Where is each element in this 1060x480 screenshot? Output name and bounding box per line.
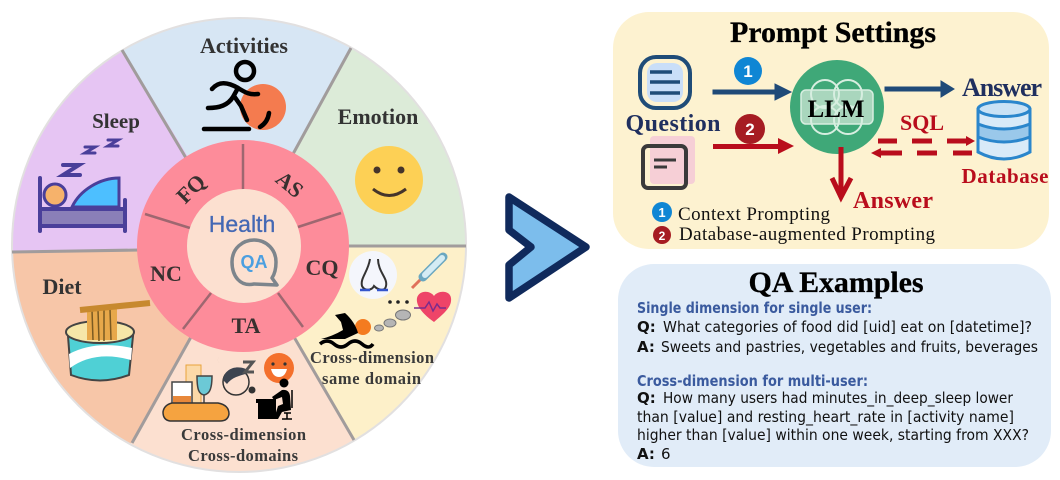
panel: activities	[124, 19, 350, 156]
text block: single dimension: A:	[637, 338, 655, 356]
label: Health: Health	[209, 211, 275, 237]
text block: cross dimension	[637, 372, 1029, 463]
text block: cross dimension: Cross-dimension for multi-user:	[637, 372, 868, 390]
arrow: context to LLM	[713, 138, 794, 154]
icon: heart	[414, 292, 451, 322]
icon: thermometer	[412, 257, 443, 288]
ring labels: FQ	[171, 169, 210, 208]
label: emotion: Emotion	[338, 104, 418, 129]
label: sleep: Sleep	[92, 109, 140, 133]
icon: context document	[643, 136, 695, 188]
badge: 1	[734, 57, 762, 85]
label: database: Database	[962, 164, 1048, 188]
text block: cross dimension: 6	[661, 445, 671, 463]
legend	[652, 202, 936, 245]
label: diet: Diet	[42, 274, 82, 299]
icon: noodle cup	[66, 303, 150, 380]
panel: sleep	[13, 52, 188, 250]
panel: QA examples	[618, 264, 1051, 467]
icon: swimmer	[320, 313, 373, 347]
icon: sleeping head	[218, 356, 256, 395]
ring labels: AS	[271, 166, 309, 203]
icon: person at desk	[256, 378, 292, 419]
text block: cross dimension: than [value] and resting_heart_rate in [activity name]	[637, 408, 1014, 427]
legend: 1	[658, 205, 666, 220]
icon: smiley	[355, 146, 423, 214]
badge: 1: 1	[743, 62, 753, 81]
ring dividers	[145, 144, 341, 329]
label: answer red: Answer	[853, 188, 933, 214]
icon: bed	[40, 140, 125, 231]
legend: Database-augmented Prompting	[679, 224, 936, 245]
icon: question document	[640, 57, 690, 108]
panel: cross-dimension cross-domains	[131, 339, 352, 471]
panel: cross-dimension same domain	[296, 248, 465, 439]
label: cross-dimension cross-domains: Cross-dimension	[181, 425, 306, 444]
panel: emotion	[296, 50, 465, 244]
text block: single dimension: Sweets and pastries, vegetables and fruits, beverages	[661, 338, 1038, 356]
thought dots	[374, 300, 410, 331]
icon: runner	[204, 62, 286, 130]
text block: cross dimension: higher than [value] within one week, starting from XXX?	[637, 426, 1029, 444]
text block: single dimension: Q:	[637, 318, 656, 336]
icon: LLM circle	[790, 60, 884, 154]
label: question: Question	[626, 111, 720, 137]
icon: LLM circle: LLM	[808, 96, 864, 123]
heading: prompt settings: Prompt Settings	[730, 16, 936, 49]
arrow: LLM to answer	[885, 81, 954, 97]
label: SQL: SQL	[900, 110, 944, 135]
label: answer blue: Answer	[962, 73, 1042, 102]
ring labels: CQ	[306, 255, 338, 280]
panel: diet	[13, 252, 189, 444]
text block: cross dimension: How many users had minutes_in_deep_sleep lower	[663, 389, 1014, 408]
icon: happy face	[264, 353, 294, 383]
text block: cross dimension: Q:	[637, 389, 656, 407]
text block: single dimension: What categories of food did [uid] eat on [datetime]?	[663, 318, 1032, 336]
legend: Context Prompting	[678, 204, 830, 225]
icon: QA speech bubble	[232, 240, 277, 285]
icon: food and drink	[163, 365, 229, 421]
text block: single dimension: Single dimension for single user:	[637, 299, 872, 317]
badge: 2	[735, 114, 765, 144]
icon: nose	[349, 251, 397, 299]
arrow: LLM down to answer	[832, 147, 851, 197]
wheel diagram	[0, 8, 480, 480]
ring labels: TA	[232, 313, 261, 338]
ring labels	[150, 166, 338, 338]
icon: QA speech bubble: QA	[240, 252, 268, 272]
text block: cross dimension: A:	[637, 445, 655, 463]
wheel dividers	[12, 48, 466, 443]
arrow: chevron	[509, 197, 586, 298]
label: activities: Activities	[200, 33, 288, 58]
label: cross-dimension same domain	[310, 348, 434, 388]
panel: prompt settings	[613, 12, 1049, 249]
inner ring	[137, 140, 349, 352]
arrow: question to LLM	[713, 84, 791, 100]
text block: single dimension	[637, 299, 1038, 356]
label: cross-dimension cross-domains: Cross-domains	[188, 446, 299, 465]
icon: database	[978, 102, 1030, 159]
label: cross-dimension cross-domains	[181, 425, 306, 465]
legend: 2	[659, 229, 666, 243]
label: cross-dimension same domain: same domain	[322, 369, 421, 388]
center circle	[187, 189, 301, 303]
ring labels: NC	[150, 261, 182, 286]
badge: 2: 2	[745, 120, 755, 139]
arrow: SQL dashes	[871, 136, 975, 158]
heading: QA examples: QA Examples	[748, 266, 924, 299]
label: cross-dimension same domain: Cross-dimension	[310, 348, 434, 367]
